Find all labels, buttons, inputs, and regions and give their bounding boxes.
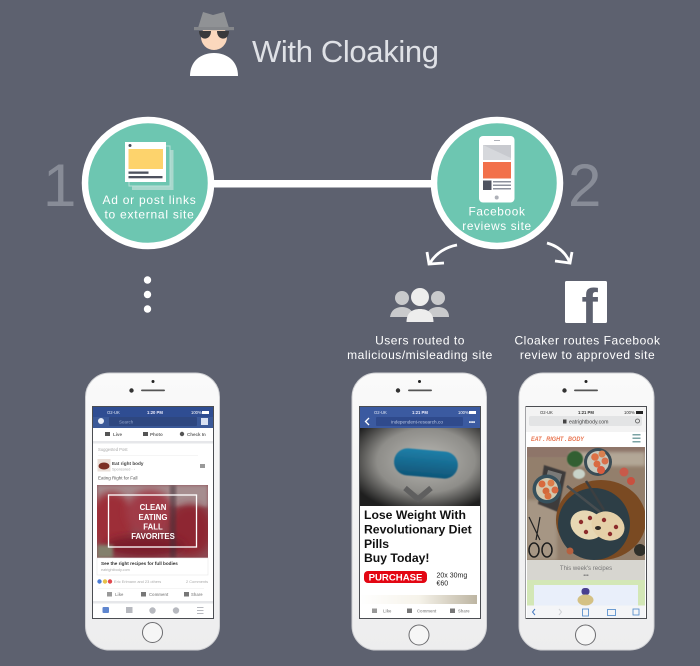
recipes band: •••	[583, 573, 589, 579]
phone 1 screen: Like	[115, 592, 124, 597]
hamburger menu	[632, 434, 640, 442]
post image	[90, 485, 212, 558]
step 1 label: to external site	[104, 208, 195, 222]
phone 1 screen: 1:20 PM	[147, 410, 163, 415]
ad headline: Revolutionary Diet	[364, 522, 472, 536]
phone 2 screen: Comment	[417, 608, 437, 614]
caption: facebook: Cloaker routes Facebook	[514, 334, 661, 348]
caption: users: malicious/misleading site	[347, 348, 493, 362]
recipes band: This week's recipes	[560, 566, 612, 572]
phone 3 screen	[526, 407, 646, 618]
phone 1 screen: Eric Erlmann and 23 others	[114, 579, 161, 584]
phone 2 screen: Share	[458, 608, 470, 614]
icon: facebook logo	[565, 280, 607, 334]
phone 1 screen: 100%	[191, 410, 202, 415]
post image headline: FAVORITES	[131, 532, 175, 541]
phone 1 screen: Sponsored · ◦	[112, 468, 136, 472]
phone 1 screen	[90, 407, 213, 618]
ad headline: Buy Today!	[364, 551, 429, 565]
step 2 label: reviews site	[462, 219, 532, 233]
phone 1 screen: eatrightbody.com	[101, 568, 130, 572]
step number 2: 2	[568, 152, 601, 219]
phone 1 screen: Eat right body	[112, 461, 144, 466]
caption: facebook: review to approved site	[520, 348, 655, 362]
ad headline: Lose Weight With	[364, 508, 466, 522]
phone 1 screen: Photo	[150, 432, 163, 437]
phone 2 screen: •••	[469, 420, 475, 426]
site logo: EAT . RIGHT . BODY	[531, 436, 585, 443]
arrow: to facebook	[547, 243, 572, 263]
purchase button: PURCHASE	[369, 572, 423, 584]
icon: phone showing site	[479, 136, 514, 202]
phone 2 screen: O2-UK	[374, 410, 387, 415]
icon: users	[390, 288, 449, 322]
panel: step 2 circle	[434, 120, 560, 246]
recipes band	[527, 560, 645, 580]
phone 1 screen: Share	[191, 592, 203, 597]
phone 1 screen: See the right recipes for full bodies	[101, 561, 178, 566]
price: €60	[436, 580, 448, 588]
phone 2 screen: 1:21 PM	[412, 410, 428, 415]
phone 1 screen: Search	[119, 420, 134, 424]
post image headline: EATING	[139, 513, 167, 522]
caption: users: Users routed to	[375, 334, 465, 348]
phone 1 screen: Suggested Post	[98, 447, 128, 452]
phone 2 screen	[360, 407, 480, 618]
panel: step 1 circle	[85, 120, 211, 246]
step number 1: 1	[43, 152, 76, 219]
phone 3: approved site	[519, 373, 654, 650]
phone 1 screen: Comment	[149, 592, 169, 597]
phone 3 screen: eatrightbody.com	[569, 420, 608, 426]
phone 3 screen: 1:21 PM	[578, 410, 594, 415]
post image headline: FALL	[143, 522, 163, 532]
phone 1 screen: O2-UK	[107, 410, 120, 415]
price: 20x 30mg	[436, 572, 467, 580]
phone 1 screen: Live	[113, 432, 123, 437]
phone 2 screen: independent-research.co	[391, 420, 443, 424]
step 2 label: Facebook	[468, 204, 526, 218]
icon: cloaked spy	[190, 12, 238, 76]
phone 2: misleading site	[352, 373, 486, 650]
step 1 label: Ad or post links	[102, 193, 197, 207]
post image headline: CLEAN	[140, 503, 167, 512]
phone 1 screen: Check In	[187, 432, 206, 437]
connector line	[205, 180, 445, 188]
phone 2 screen: Like	[383, 608, 392, 614]
icon: blue pill	[393, 447, 459, 480]
arrow: to users	[427, 245, 457, 264]
icon: facebook logo: f	[582, 280, 598, 334]
phone 1 screen: 2 Comments	[186, 579, 208, 584]
title: With Cloaking	[252, 34, 439, 69]
food photo	[527, 447, 646, 560]
phone 1: facebook feed	[86, 373, 220, 650]
vertical dots	[144, 276, 151, 313]
icon: stacked ad post	[125, 142, 174, 190]
phone 3 screen: O2-UK	[540, 410, 553, 415]
phone 3 screen: 100%	[624, 410, 635, 415]
ad headline: Pills	[364, 537, 389, 551]
phone 1 screen: Eating Right for Fall	[98, 476, 138, 480]
phone 2 screen: 100%	[458, 410, 469, 415]
